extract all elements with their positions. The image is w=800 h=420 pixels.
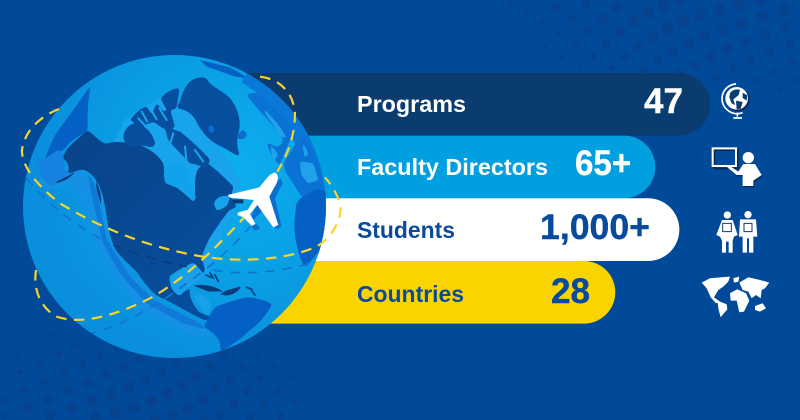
value: 47: 47 xyxy=(644,82,683,121)
south america xyxy=(204,297,272,352)
caribbean islands xyxy=(197,273,255,295)
icon: two students xyxy=(716,211,757,253)
shelf: arctic and east canada xyxy=(115,97,240,273)
alaska dark inlet xyxy=(57,172,101,204)
airplane body xyxy=(228,173,278,227)
alaska shelf xyxy=(37,150,69,186)
airplane shadow xyxy=(248,178,283,231)
africa xyxy=(294,190,326,266)
north america landmass xyxy=(63,131,237,320)
faint dark orbit trail over land xyxy=(113,245,187,267)
coast lake by airplane wing xyxy=(232,199,243,203)
label: Countries: Countries xyxy=(357,281,464,307)
western europe landmass xyxy=(284,144,306,197)
europe shelf light xyxy=(264,110,318,183)
faint orbit trails on globe xyxy=(27,157,310,335)
gulf shelf xyxy=(170,267,211,315)
label: Programs: Programs xyxy=(357,91,466,117)
background dot pattern: top right xyxy=(508,0,800,157)
bar: programs xyxy=(200,73,710,136)
shelf: west coast mid band xyxy=(87,170,208,330)
globe xyxy=(23,55,330,358)
limb band along north east edge xyxy=(247,73,316,200)
iceland and baffin lake xyxy=(208,125,247,139)
shelf: west coast light band xyxy=(33,167,213,337)
greenland xyxy=(177,77,240,156)
value: 28: 28 xyxy=(551,272,590,311)
airplane icon xyxy=(228,173,283,231)
north europe strip xyxy=(200,60,245,78)
bar: students xyxy=(200,198,679,261)
gulf of st lawrence xyxy=(214,196,230,211)
icon: world map xyxy=(702,277,769,317)
icon: desk globe xyxy=(722,84,750,118)
arctic channels xyxy=(138,108,203,163)
background dot pattern: bottom left xyxy=(0,325,298,420)
value: 1,000+: 1,000+ xyxy=(540,208,650,247)
value: 65+: 65+ xyxy=(575,144,631,183)
label: Faculty Directors: Faculty Directors xyxy=(357,154,548,180)
icon: teacher at board xyxy=(713,148,763,187)
orbit dashes: rear and front loop xyxy=(22,77,341,320)
bar: faculty directors xyxy=(200,136,655,198)
bar: countries xyxy=(200,261,615,324)
label: Students: Students xyxy=(357,217,455,243)
europe northern landmass xyxy=(247,93,293,165)
russia landmass xyxy=(45,88,90,158)
hudson bay xyxy=(164,161,196,200)
arctic islands xyxy=(123,88,210,168)
